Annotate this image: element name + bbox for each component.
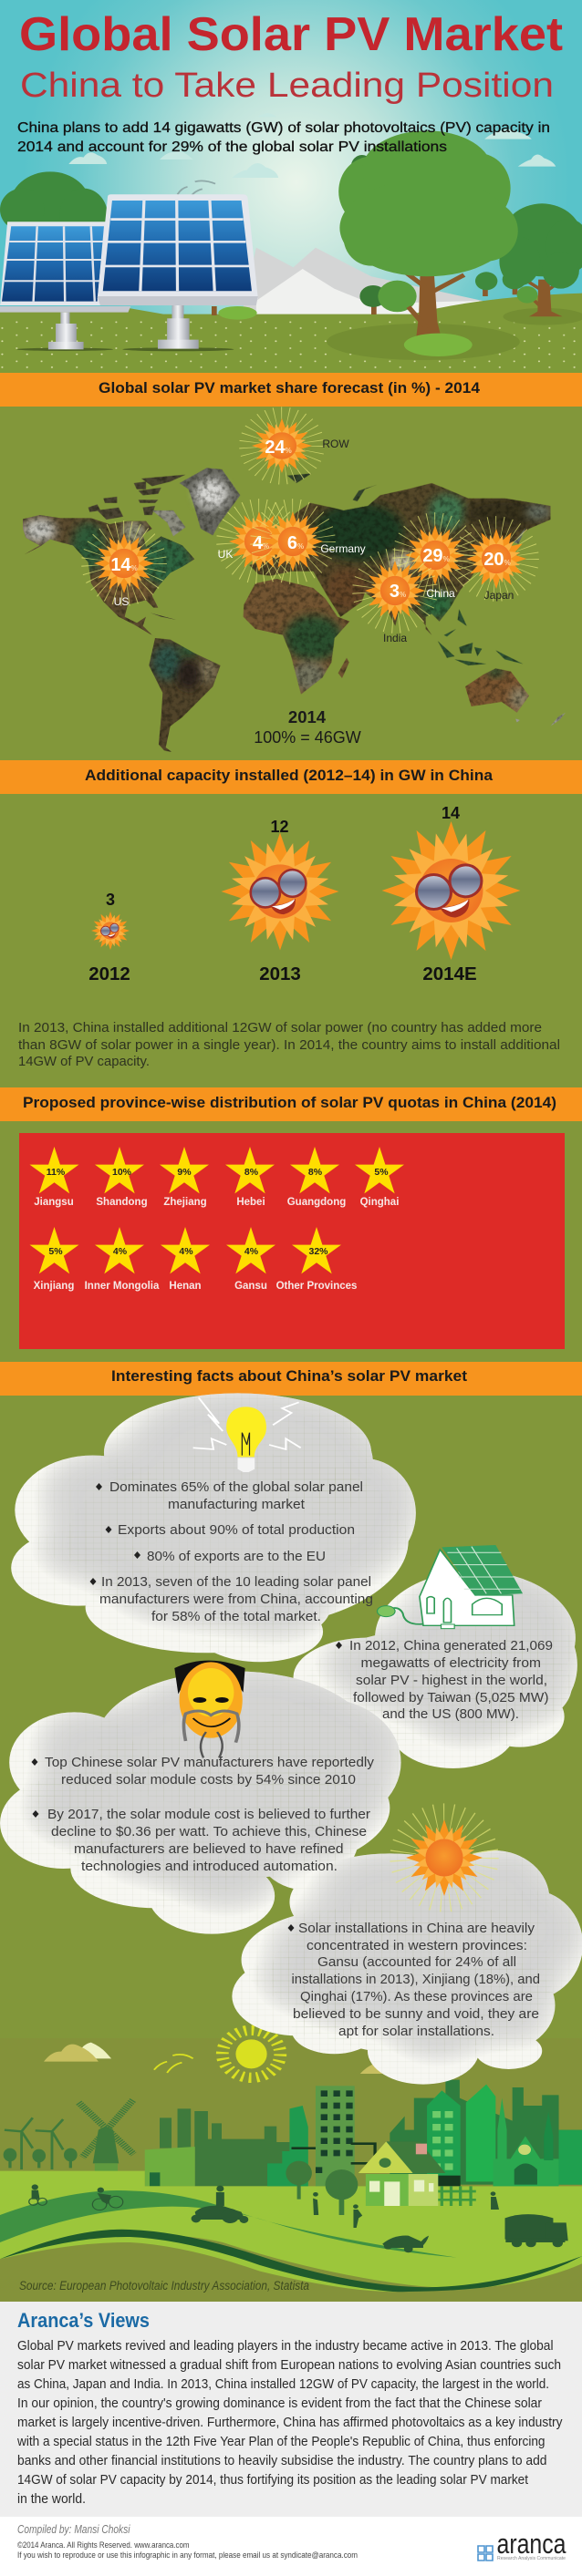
intro text: China plans to add 14 gigawatts (GW) of solar photovoltaics (PV) capacity in [17, 120, 550, 136]
star: Hebei [225, 1147, 275, 1208]
green body background [0, 373, 582, 2302]
star: Qinghai: 5% [374, 1167, 389, 1178]
panel: world map [18, 417, 566, 757]
cloud: house [294, 1571, 577, 1768]
star: Gansu [226, 1227, 275, 1292]
star: Guangdong: 8% [308, 1167, 323, 1178]
panel: province quotas flag [19, 1133, 565, 1349]
heading band: province quotas [0, 1087, 582, 1121]
tree shadow [327, 324, 520, 360]
New Zealand and Tasmania [515, 713, 566, 726]
windmill [78, 2100, 134, 2174]
far trees [212, 270, 526, 315]
sun: China 29%: 29% [422, 546, 450, 566]
star: Zhejiang: 9% [177, 1167, 192, 1178]
fact list: house cloud: followed by Taiwan (5,025 MW) [353, 1691, 549, 1705]
fact list: face cloud: Top Chinese solar PV manufacturers have reportedly [45, 1756, 375, 1770]
sun 2012 [88, 891, 130, 984]
star: Other Provinces: 32% [308, 1246, 328, 1257]
heading band: additional capacity [0, 760, 582, 794]
sun 2013: 12 [270, 818, 289, 836]
country labels: ROW [322, 438, 349, 450]
fact list: sun cloud: installations in 2013), Xinjiang (18%), and [292, 1973, 540, 1987]
scene artwork [0, 113, 582, 374]
icon: solar house with plug [378, 1545, 523, 1629]
Southeast Asia and Indonesia [438, 609, 523, 665]
fact list: house cloud [336, 1639, 553, 1722]
clouds [44, 2043, 393, 2074]
cloud: bulb [11, 1393, 416, 1662]
copyright: If you wish to reproduce or use this infographic in any format, please email us at syndicate@aranca.com [17, 2550, 358, 2561]
sun 2014E: 2014E [422, 963, 477, 984]
country labels: China [426, 587, 455, 600]
fact list: bulb cloud: Dominates 65% of the global solar panel [109, 1480, 363, 1495]
sun: India 3% [362, 558, 428, 623]
birds [178, 180, 215, 199]
icon: smiling face [174, 1661, 245, 1757]
capacity note: than 8GW of solar power in a single year). In 2014, the country aims to install additional [18, 1037, 560, 1053]
logo: Research Analysis Communicate [497, 2556, 566, 2561]
Arctic islands [88, 475, 185, 520]
sun 2014E [379, 804, 524, 984]
fact list: sun cloud: Solar installations in China are heavily [298, 1922, 535, 1936]
sun: Japan 20% [463, 526, 529, 592]
sun 2013: 2013 [259, 963, 301, 984]
fact list: bulb cloud: manufacturing market [168, 1498, 305, 1512]
panel: capacity by year [18, 804, 560, 1069]
fact list: house cloud: and the US (800 MW). [382, 1707, 519, 1722]
views body: in the world. [17, 2491, 86, 2507]
heading band: market share: Global solar PV market share forecast (in %) - 2014 [99, 379, 481, 397]
Madagascar [338, 658, 349, 678]
sun: UK 4%: 4% [253, 533, 269, 553]
mountains [242, 248, 483, 316]
star: Xinjiang: Xinjiang [34, 1281, 74, 1292]
star: Guangdong [287, 1147, 346, 1208]
views body: with a special status in the 12th Five Year Plan of the People's Republic of China, thus enforcing [16, 2434, 546, 2449]
Greenland [180, 468, 240, 535]
fact list: sun cloud: believed to be sunny and void, they are [293, 2007, 539, 2022]
heading band: additional capacity: Additional capacity installed (2012–14) in GW in China [85, 767, 494, 784]
Caribbean [151, 613, 176, 620]
star: Xinjiang [29, 1227, 78, 1292]
Sakhalin [514, 527, 526, 544]
views body: banks and other financial institutions to heavily subsidise the industry. The country plans to add [17, 2453, 547, 2468]
fact list: house cloud: megawatts of electricity from [361, 1656, 541, 1671]
fact list: face cloud: manufacturers are believed to have refined [74, 1842, 343, 1857]
star: Shandong [95, 1147, 148, 1208]
compiled by: Compiled by: Mansi Choksi [17, 2522, 130, 2536]
ground [0, 2171, 582, 2288]
map: Americas [18, 468, 240, 757]
views body: 14GW of solar PV capacity by 2014, thus fortifying its position as the leading solar PV market [17, 2472, 529, 2488]
star: Henan: 4% [179, 1246, 193, 1257]
panel: facts clouds [0, 1393, 582, 2085]
fact list: bulb cloud: In 2013, seven of the 10 leading solar panel [101, 1575, 371, 1590]
panel: Aranca's views [0, 2302, 582, 2517]
footer [17, 2522, 566, 2561]
star: Qinghai [355, 1147, 404, 1208]
star: Henan [161, 1227, 210, 1292]
fact list: face cloud: By 2017, the solar module cost is believed to further [47, 1808, 370, 1822]
right tree [499, 203, 582, 316]
fact list: sun cloud [288, 1922, 540, 2039]
Australia [465, 668, 529, 713]
views heading: Aranca’s Views [17, 2309, 150, 2332]
fact list: sun cloud: concentrated in western provinces: [307, 1939, 527, 1953]
South America [150, 638, 221, 752]
fact list: bulb cloud: Exports about 90% of total production [118, 1523, 355, 1538]
Arctic Russia and Svalbard [287, 473, 377, 501]
star: Jiangsu [29, 1147, 78, 1208]
sun: Germany 6%: 6% [287, 533, 304, 553]
front solar panel [98, 194, 258, 351]
city skyline [390, 2080, 582, 2186]
back solar panel [0, 222, 130, 351]
fact list: face cloud: decline to $0.36 per watt. To achieve this, Chinese [51, 1825, 367, 1839]
Eurasia [246, 480, 554, 641]
title: Global Solar PV Market [19, 8, 563, 61]
subtitle: China to Take Leading Position [20, 67, 554, 105]
small clouds [68, 113, 556, 178]
star: Guangdong: Guangdong [287, 1197, 346, 1208]
heading band: market share [0, 373, 582, 407]
people and vehicles [29, 2184, 568, 2252]
fact list: sun cloud: Qinghai (17%). As these provinces are [300, 1990, 533, 2004]
star: Jiangsu: Jiangsu [34, 1197, 74, 1208]
country labels [114, 438, 514, 644]
cloud: face [0, 1671, 401, 1934]
icon: sun on cloud [403, 1817, 485, 1899]
star: Other Provinces [276, 1227, 357, 1292]
sun: India 3%: 3% [390, 582, 406, 602]
star: Inner Mongolia: 4% [113, 1246, 128, 1257]
map: Eurasia, Africa, Oceania [240, 473, 566, 726]
panel: bottom city scene [0, 2030, 582, 2302]
fact list: bulb cloud: 80% of exports are to the EU [147, 1550, 326, 1564]
fact list: face cloud [31, 1756, 375, 1874]
star: Shandong: Shandong [96, 1197, 148, 1208]
fact list: bulb cloud [89, 1480, 373, 1624]
capacity note: 14GW of PV capacity. [18, 1054, 150, 1069]
birds [154, 2055, 193, 2073]
icon: light bulb [193, 1397, 301, 1472]
heading band: province quotas: Proposed province-wise distribution of solar PV quotas in China (2014) [23, 1094, 556, 1111]
country labels: Japan [484, 589, 514, 602]
copyright [17, 2540, 358, 2561]
logo [478, 2528, 566, 2561]
heading band: interesting facts [0, 1362, 582, 1396]
star: Shandong: 10% [112, 1167, 132, 1178]
sun [223, 2030, 280, 2077]
logo: aranca [496, 2528, 566, 2560]
intro text [17, 120, 550, 155]
roadside trees [4, 2148, 78, 2168]
bushes [218, 306, 473, 356]
views body [16, 2338, 563, 2507]
fact list: sun cloud: Gansu (accounted for 24% of all [317, 1955, 516, 1970]
map total: 2014 [288, 707, 327, 726]
fact list: face cloud: reduced solar module costs by 54% since 2010 [61, 1773, 356, 1788]
star: Inner Mongolia [85, 1227, 160, 1292]
star: Zhejiang: Zhejiang [163, 1197, 207, 1208]
star: Jiangsu: 11% [47, 1167, 66, 1178]
Baffin Island [152, 510, 185, 536]
sun: Germany 6% [260, 509, 326, 574]
sun: ROW 24% [249, 417, 315, 475]
capacity note [18, 1020, 560, 1069]
sun 2014E: 14 [442, 804, 460, 822]
star: Inner Mongolia: Inner Mongolia [85, 1281, 160, 1292]
wind turbines [5, 2117, 63, 2169]
star: Qinghai: Qinghai [360, 1197, 399, 1208]
sky [0, 0, 582, 319]
sun: China 29% [402, 522, 468, 588]
cloud: sun [232, 1850, 582, 2085]
capacity note: In 2013, China installed additional 12GW of solar power (no country has added more [18, 1020, 542, 1036]
sun: UK 4% [226, 509, 292, 574]
star: Other Provinces: Other Provinces [276, 1281, 357, 1292]
sun: ROW 24%: 24% [265, 438, 292, 458]
North America [23, 515, 195, 636]
copyright: ©2014 Aranca. All Rights Reserved. www.aranca.com [17, 2540, 190, 2550]
star: Henan: Henan [169, 1281, 202, 1292]
star: Gansu: Gansu [234, 1281, 267, 1292]
star: Xinjiang: 5% [48, 1246, 63, 1257]
country labels: US [114, 595, 129, 608]
sun 2013 [219, 818, 341, 984]
sun: Japan 20%: 20% [483, 550, 511, 570]
tower [267, 2086, 375, 2186]
fact list: face cloud: technologies and introduced automation. [81, 1860, 338, 1874]
fact list: bulb cloud: for 58% of the total market. [151, 1610, 321, 1624]
intro text: 2014 and account for 29% of the global solar PV installations [17, 139, 447, 155]
sun: US 14% [91, 531, 157, 596]
factory [145, 2108, 289, 2186]
house [359, 2141, 445, 2206]
map total: 100% = 46GW [254, 728, 361, 747]
fact list: house cloud: solar PV - highest in the world, [356, 1674, 547, 1688]
wave [0, 2230, 582, 2302]
map total [254, 707, 361, 747]
sun: US 14%: 14% [110, 555, 138, 575]
fact list: sun cloud: apt for solar installations. [338, 2025, 494, 2039]
sun 2012: 3 [106, 891, 115, 909]
heading band: interesting facts: Interesting facts about China’s solar PV market [111, 1367, 467, 1385]
country labels: UK [218, 548, 233, 561]
fence [438, 2186, 476, 2206]
trees [286, 2161, 358, 2215]
country labels: Germany [320, 542, 366, 555]
panel: hero scene [0, 0, 582, 374]
star: Gansu: 4% [244, 1246, 259, 1257]
star: Hebei: 8% [244, 1167, 259, 1178]
fact list: bulb cloud: manufacturers were from China, accounting [99, 1592, 373, 1607]
fact list: house cloud: In 2012, China generated 21,069 [349, 1639, 553, 1654]
views body: In our opinion, the country's growing dominance is evident from the fact that the Chinese solar [17, 2396, 542, 2411]
sun 2012: 2012 [88, 963, 130, 984]
big tree [338, 130, 518, 340]
ground [0, 294, 582, 374]
star: Hebei: Hebei [236, 1197, 265, 1208]
Africa [240, 577, 353, 699]
road [0, 2190, 457, 2258]
source: Source: European Photovoltaic Industry Association, Statista [19, 2279, 309, 2293]
left tree [0, 171, 108, 243]
star: Zhejiang [160, 1147, 209, 1208]
country labels: India [383, 632, 407, 644]
